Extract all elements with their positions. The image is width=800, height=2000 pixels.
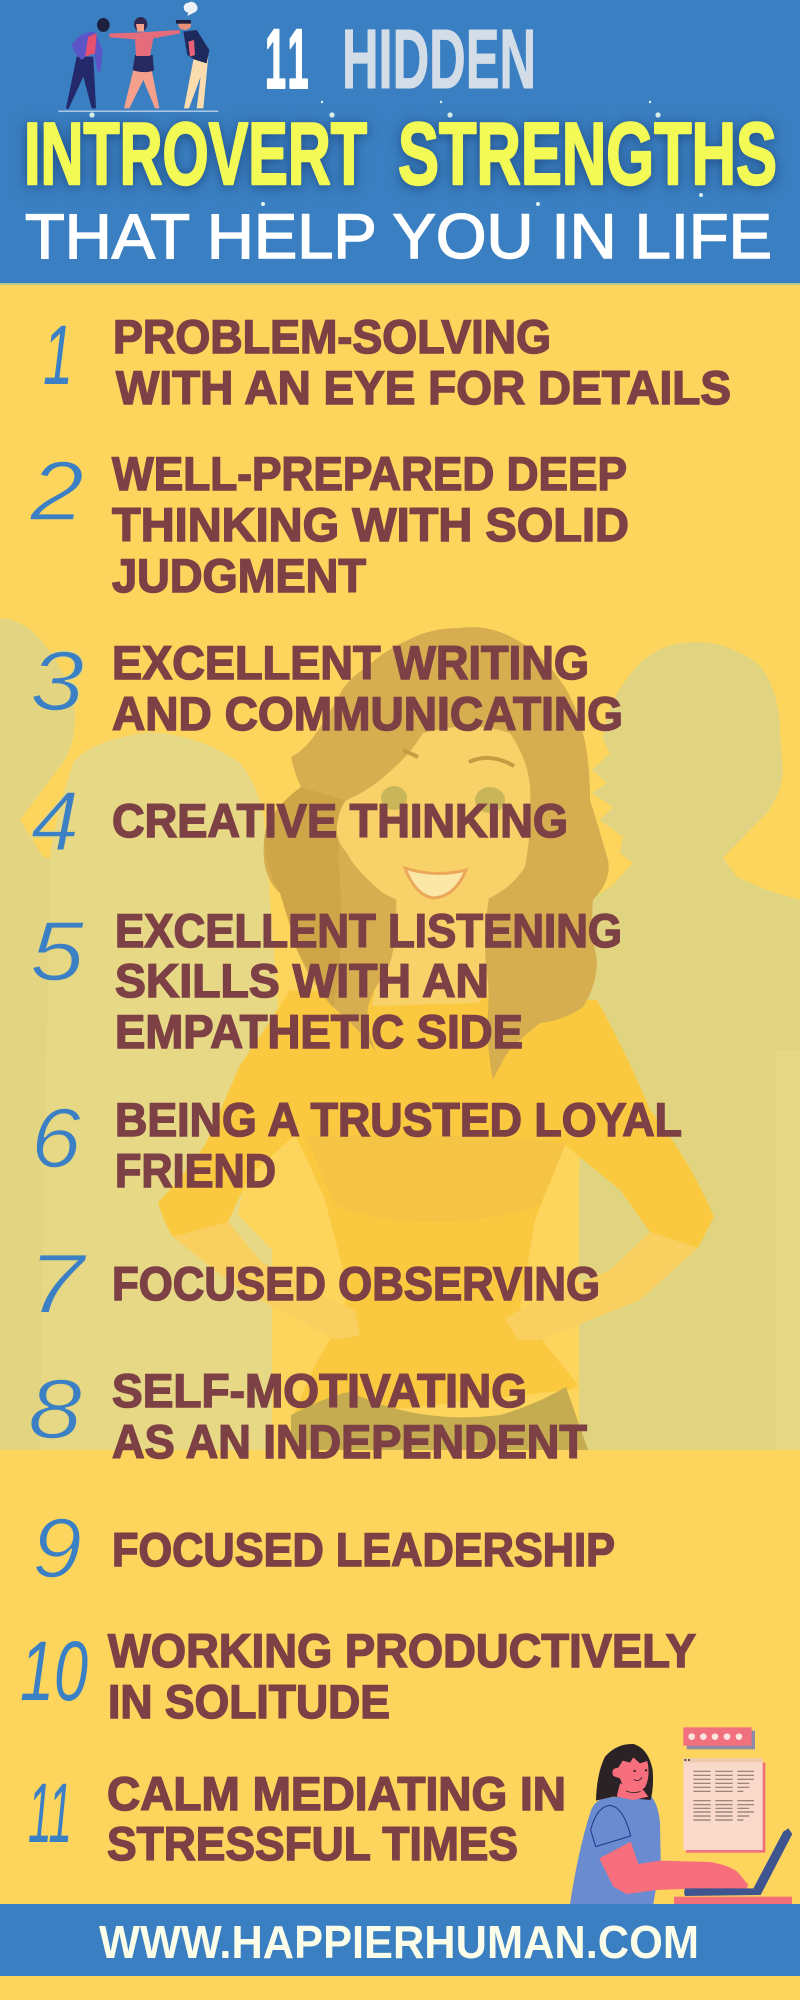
header sparkles — [89, 101, 703, 206]
number 7: 7 — [28, 1237, 88, 1331]
text — [113, 310, 731, 414]
item 1 — [43, 308, 731, 414]
skirt — [291, 1387, 588, 1450]
yellow gaps beside body — [238, 1130, 360, 1450]
title: 11 HIDDEN — [265, 12, 536, 106]
text: EXCELLENT WRITING — [112, 636, 589, 689]
title: INTROVERT STRENGTHS — [24, 104, 777, 203]
item 7 — [28, 1237, 600, 1331]
face — [337, 726, 530, 910]
left eyebrow — [403, 750, 418, 757]
item 3 — [30, 634, 623, 740]
text: AND COMMUNICATING — [112, 687, 623, 740]
mouth — [405, 868, 466, 898]
text: CALM MEDIATING IN — [107, 1767, 566, 1820]
website: WWW.HAPPIERHUMAN.COM — [99, 1916, 699, 1968]
text: FOCUSED OBSERVING — [112, 1257, 600, 1310]
background illustration: woman and silhouettes — [0, 618, 800, 1450]
neck and chest — [372, 885, 500, 1006]
item 8 — [28, 1362, 587, 1468]
silhouette: far left person — [0, 618, 75, 1450]
illustration: three figures arguing — [58, 2, 218, 112]
item 5 — [30, 904, 622, 1058]
desk pad — [674, 1897, 792, 1905]
right eyebrow — [469, 758, 514, 766]
number 6: 6 — [31, 1091, 81, 1185]
text — [108, 1624, 696, 1728]
text: FRIEND — [115, 1144, 276, 1197]
text: STRESSFUL TIMES — [107, 1817, 518, 1870]
hair lower left shade — [265, 787, 345, 1007]
left man — [66, 18, 110, 109]
right man — [176, 20, 209, 108]
footer band — [0, 1904, 800, 1976]
text — [107, 1767, 566, 1870]
number 10: 10 — [20, 1624, 88, 1718]
item 9 — [32, 1501, 615, 1595]
illustration: woman typing on laptop — [570, 1727, 792, 1905]
header band — [0, 0, 800, 285]
right forearm — [505, 1232, 698, 1340]
number 4: 4 — [31, 774, 79, 868]
body — [570, 1795, 661, 1904]
number 5: 5 — [30, 904, 84, 998]
text — [112, 1364, 587, 1468]
arm — [599, 1842, 748, 1894]
title — [24, 12, 777, 272]
title: 11 HIDDEN: 11 — [265, 12, 309, 106]
number 2: 2 — [29, 444, 84, 538]
document — [683, 1758, 765, 1853]
right eye — [475, 787, 505, 813]
neck — [617, 1783, 648, 1800]
yellow gap right of body — [520, 1183, 579, 1450]
text: WORKING PRODUCTIVELY — [108, 1624, 696, 1677]
text: CREATIVE THINKING — [112, 794, 568, 847]
title: INTROVERT STRENGTHS: INTROVERT — [24, 104, 367, 203]
text: WITH AN EYE FOR DETAILS — [116, 361, 731, 414]
number 9: 9 — [32, 1501, 82, 1595]
smoke cloud — [184, 2, 198, 16]
text: BEING A TRUSTED LOYAL — [115, 1093, 682, 1146]
sleeve detail — [591, 1805, 631, 1847]
title: 11 HIDDEN: HIDDEN — [342, 12, 536, 106]
text — [112, 447, 629, 602]
text: JUDGMENT — [112, 549, 366, 602]
text — [112, 636, 623, 740]
ground line — [58, 110, 218, 113]
text — [115, 904, 622, 1058]
left eye — [381, 786, 407, 810]
text: FOCUSED LEADERSHIP — [112, 1523, 615, 1576]
text: PROBLEM-SOLVING — [113, 310, 551, 363]
eyes and smile — [626, 1769, 647, 1793]
text — [115, 1093, 682, 1197]
hair — [264, 627, 609, 1080]
item 6 — [31, 1091, 682, 1197]
text: WELL-PREPARED DEEP — [112, 447, 627, 500]
silhouette: front left person — [40, 732, 310, 1450]
number 8: 8 — [28, 1362, 82, 1456]
text: EXCELLENT LISTENING — [115, 904, 622, 957]
subtitle: THAT HELP YOU IN LIFE — [25, 202, 772, 272]
silhouette: right person — [579, 642, 800, 1450]
number 1: 1 — [43, 308, 73, 402]
rating card — [683, 1727, 755, 1749]
face — [612, 1757, 649, 1793]
text: SKILLS WITH AN — [115, 954, 489, 1007]
text: THINKING WITH SOLID — [112, 498, 629, 551]
number 3: 3 — [30, 634, 84, 728]
hair — [596, 1744, 653, 1801]
item 2 — [29, 444, 629, 602]
shirt chest shading — [306, 1135, 566, 1222]
text: AS AN INDEPENDENT — [112, 1415, 587, 1468]
shirt — [158, 990, 714, 1420]
text: SELF-MOTIVATING — [112, 1364, 527, 1417]
item 11 — [28, 1766, 566, 1870]
text: IN SOLITUDE — [108, 1675, 390, 1728]
number 11: 11 — [28, 1766, 72, 1860]
text: EMPATHETIC SIDE — [115, 1005, 523, 1058]
laptop — [684, 1828, 792, 1896]
item 4 — [31, 774, 568, 868]
left forearm — [173, 1222, 360, 1340]
middle woman — [109, 17, 180, 108]
silhouette: far right strip — [776, 1050, 800, 1450]
item 10 — [20, 1624, 696, 1728]
